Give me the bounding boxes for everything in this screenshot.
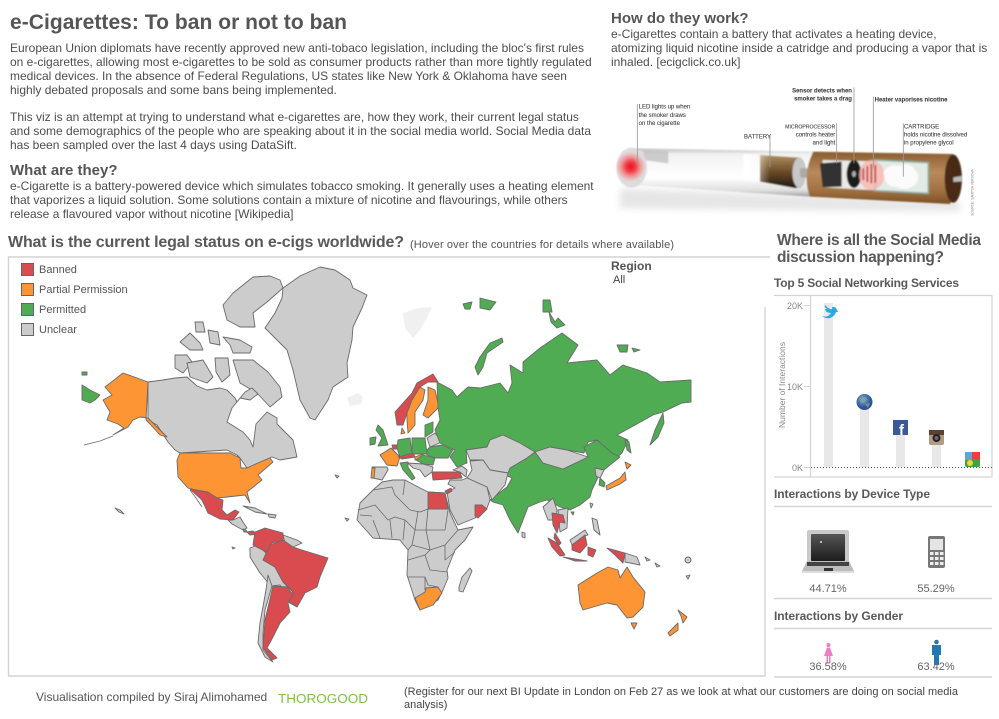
europe bbox=[370, 374, 453, 480]
heading: legal status bbox=[8, 234, 674, 251]
diagram: e-cigarette anatomy: on the cigarette bbox=[639, 121, 681, 127]
intro text block: on e-cigarettes, allowing most e-cigarettes to be sold as consumer products rather than more tightly regulated bbox=[10, 55, 592, 69]
label: gender shares: 36.58% bbox=[809, 661, 847, 673]
diagram: e-cigarette anatomy: SOURCE: SAMPSA VERSOVA bbox=[970, 169, 974, 216]
text block: how do they work bbox=[611, 27, 987, 69]
south america bbox=[250, 528, 328, 662]
icon: facebook: f bbox=[899, 422, 905, 439]
diagram: e-cigarette anatomy: the smoker draws bbox=[639, 113, 686, 119]
heading: device type: Interactions by Device Type bbox=[774, 487, 930, 501]
footer: credit: Visualisation compiled by Siraj Alimohamed bbox=[36, 690, 267, 704]
africa bbox=[357, 480, 473, 610]
diagram: e-cigarette anatomy: controls heater bbox=[796, 133, 835, 139]
diagram: e-cigarette anatomy: LED lights up when bbox=[639, 105, 690, 111]
label: gender shares bbox=[809, 661, 955, 673]
legend: status colours: Partial Permission bbox=[39, 284, 128, 296]
text block: how do they work: atomizing liquid nicotine inside a catridge and producing a vapor that is bbox=[611, 41, 987, 55]
text block: what are they: release a flavoured vapor without nicotine [Wikipedia] bbox=[10, 207, 294, 221]
diagram: e-cigarette anatomy bbox=[616, 87, 974, 216]
chart: top 5 social networking services bbox=[774, 295, 992, 477]
diagram: e-cigarette anatomy: Sensor detects when bbox=[792, 88, 852, 94]
diagram: e-cigarette anatomy: MICROPROCESSOR bbox=[785, 124, 836, 130]
intro text block: highly debated proposals and some bans being implemented. bbox=[10, 83, 337, 97]
intro text block: European Union diplomats have recently approved new anti-tobaco legislation, including the bloc's first rules bbox=[10, 41, 584, 55]
intro text block: and some demographics of the people who are speaking about it in the social media world. Social Media data bbox=[10, 124, 591, 138]
heading: social media bbox=[777, 232, 981, 266]
icon: globe bbox=[856, 394, 872, 410]
filter: region: Region bbox=[611, 259, 652, 273]
heading: legal status: What is the current legal status on e-cigs worldwide? bbox=[8, 234, 404, 251]
icon: mobile phone bbox=[928, 536, 945, 568]
intro text block: has been sampled over the last 4 days using DataSift. bbox=[10, 138, 297, 152]
panel: gender bbox=[809, 640, 955, 673]
filter: region bbox=[611, 259, 652, 286]
intro text block: This viz is an attempt at trying to understand what e-cigarettes are, how they work, their current legal status bbox=[10, 110, 579, 124]
icon: facebook bbox=[893, 420, 908, 439]
icon: male bbox=[932, 640, 941, 665]
heading: social media: discussion happening? bbox=[777, 249, 944, 266]
diagram: e-cigarette anatomy: BATTERY bbox=[744, 134, 771, 140]
diagram: e-cigarette anatomy: smoker takes a drag bbox=[794, 97, 852, 103]
heading: social media: Where is all the Social Media bbox=[777, 232, 981, 249]
logo: Thorogood: THOROGOOD bbox=[278, 691, 368, 706]
chart: top 5 social networking services: 0K bbox=[792, 463, 803, 473]
title: e-Cigarettes: To ban or not to ban bbox=[10, 11, 347, 34]
intro text block bbox=[10, 41, 592, 152]
faint islands: Iceland and Svalbard bbox=[347, 307, 432, 406]
oceania bbox=[115, 475, 691, 636]
panel: map frame bbox=[8, 257, 770, 676]
label: device shares bbox=[809, 583, 955, 595]
icon: laptop bbox=[802, 530, 854, 573]
icon: google plus bbox=[965, 452, 980, 467]
filter: region: All bbox=[613, 274, 625, 286]
bars bbox=[824, 303, 941, 467]
text block: what are they: that vaporizes a liquid solution. Some solutions contain a mixture of nicotine and flavourings, while others bbox=[10, 193, 568, 207]
footer: register note bbox=[404, 686, 959, 711]
diagram: e-cigarette anatomy: in propylene glycol bbox=[904, 141, 954, 147]
label: device shares: 55.29% bbox=[917, 583, 955, 595]
diagram: e-cigarette anatomy: CARTRIDGE bbox=[904, 124, 939, 130]
legend: status colours: Unclear bbox=[39, 324, 77, 336]
diagram: e-cigarette anatomy: Heater vaporises nicotine bbox=[875, 97, 948, 103]
heading: top 5 services: Top 5 Social Networking Services bbox=[774, 276, 959, 290]
chart: top 5 social networking services: Number of Interactions bbox=[777, 342, 787, 428]
legend: status colours: Permitted bbox=[39, 304, 86, 316]
chart: top 5 social networking services: 20K bbox=[787, 301, 803, 311]
heading: what are they: What are they? bbox=[10, 162, 118, 179]
label: gender shares: 63.42% bbox=[917, 661, 955, 673]
icon: female bbox=[824, 643, 833, 663]
asia bbox=[432, 298, 691, 565]
legend: status colours bbox=[22, 264, 128, 336]
text block: how do they work: inhaled. [ecigclick.co.uk] bbox=[611, 55, 740, 69]
heading: how do they work: How do they work? bbox=[611, 10, 749, 27]
diagram: e-cigarette anatomy: and light bbox=[813, 141, 836, 147]
icon: instagram bbox=[929, 430, 944, 445]
footer: register note: (Register for our next BI Update in London on Feb 27 as we look at what our customers are doing on social media bbox=[404, 686, 959, 698]
text block: how do they work: e-Cigarettes contain a battery that activates a heating device, bbox=[611, 27, 937, 41]
world map bbox=[82, 267, 691, 662]
icon: twitter bbox=[822, 305, 838, 318]
footer: register note: analysis) bbox=[404, 699, 447, 711]
text block: what are they bbox=[10, 179, 594, 221]
intro text block: medical devices. In the absence of Federal Regulations, US states like New York & Oklahoma have seen bbox=[10, 69, 567, 83]
legend: status colours: Banned bbox=[39, 264, 77, 276]
diagram: e-cigarette anatomy: holds nicotine dissolved bbox=[904, 133, 967, 139]
heading: legal status: (Hover over the countries for details where available) bbox=[410, 239, 674, 251]
text block: what are they: e-Cigarette is a battery-powered device which simulates tobacco smoking. It generally uses a heating element bbox=[10, 179, 594, 193]
panel: device type bbox=[802, 530, 955, 595]
label: device shares: 44.71% bbox=[809, 583, 847, 595]
north america bbox=[82, 267, 367, 535]
heading: gender: Interactions by Gender bbox=[774, 609, 903, 623]
chart: top 5 social networking services: 10K bbox=[787, 382, 803, 392]
